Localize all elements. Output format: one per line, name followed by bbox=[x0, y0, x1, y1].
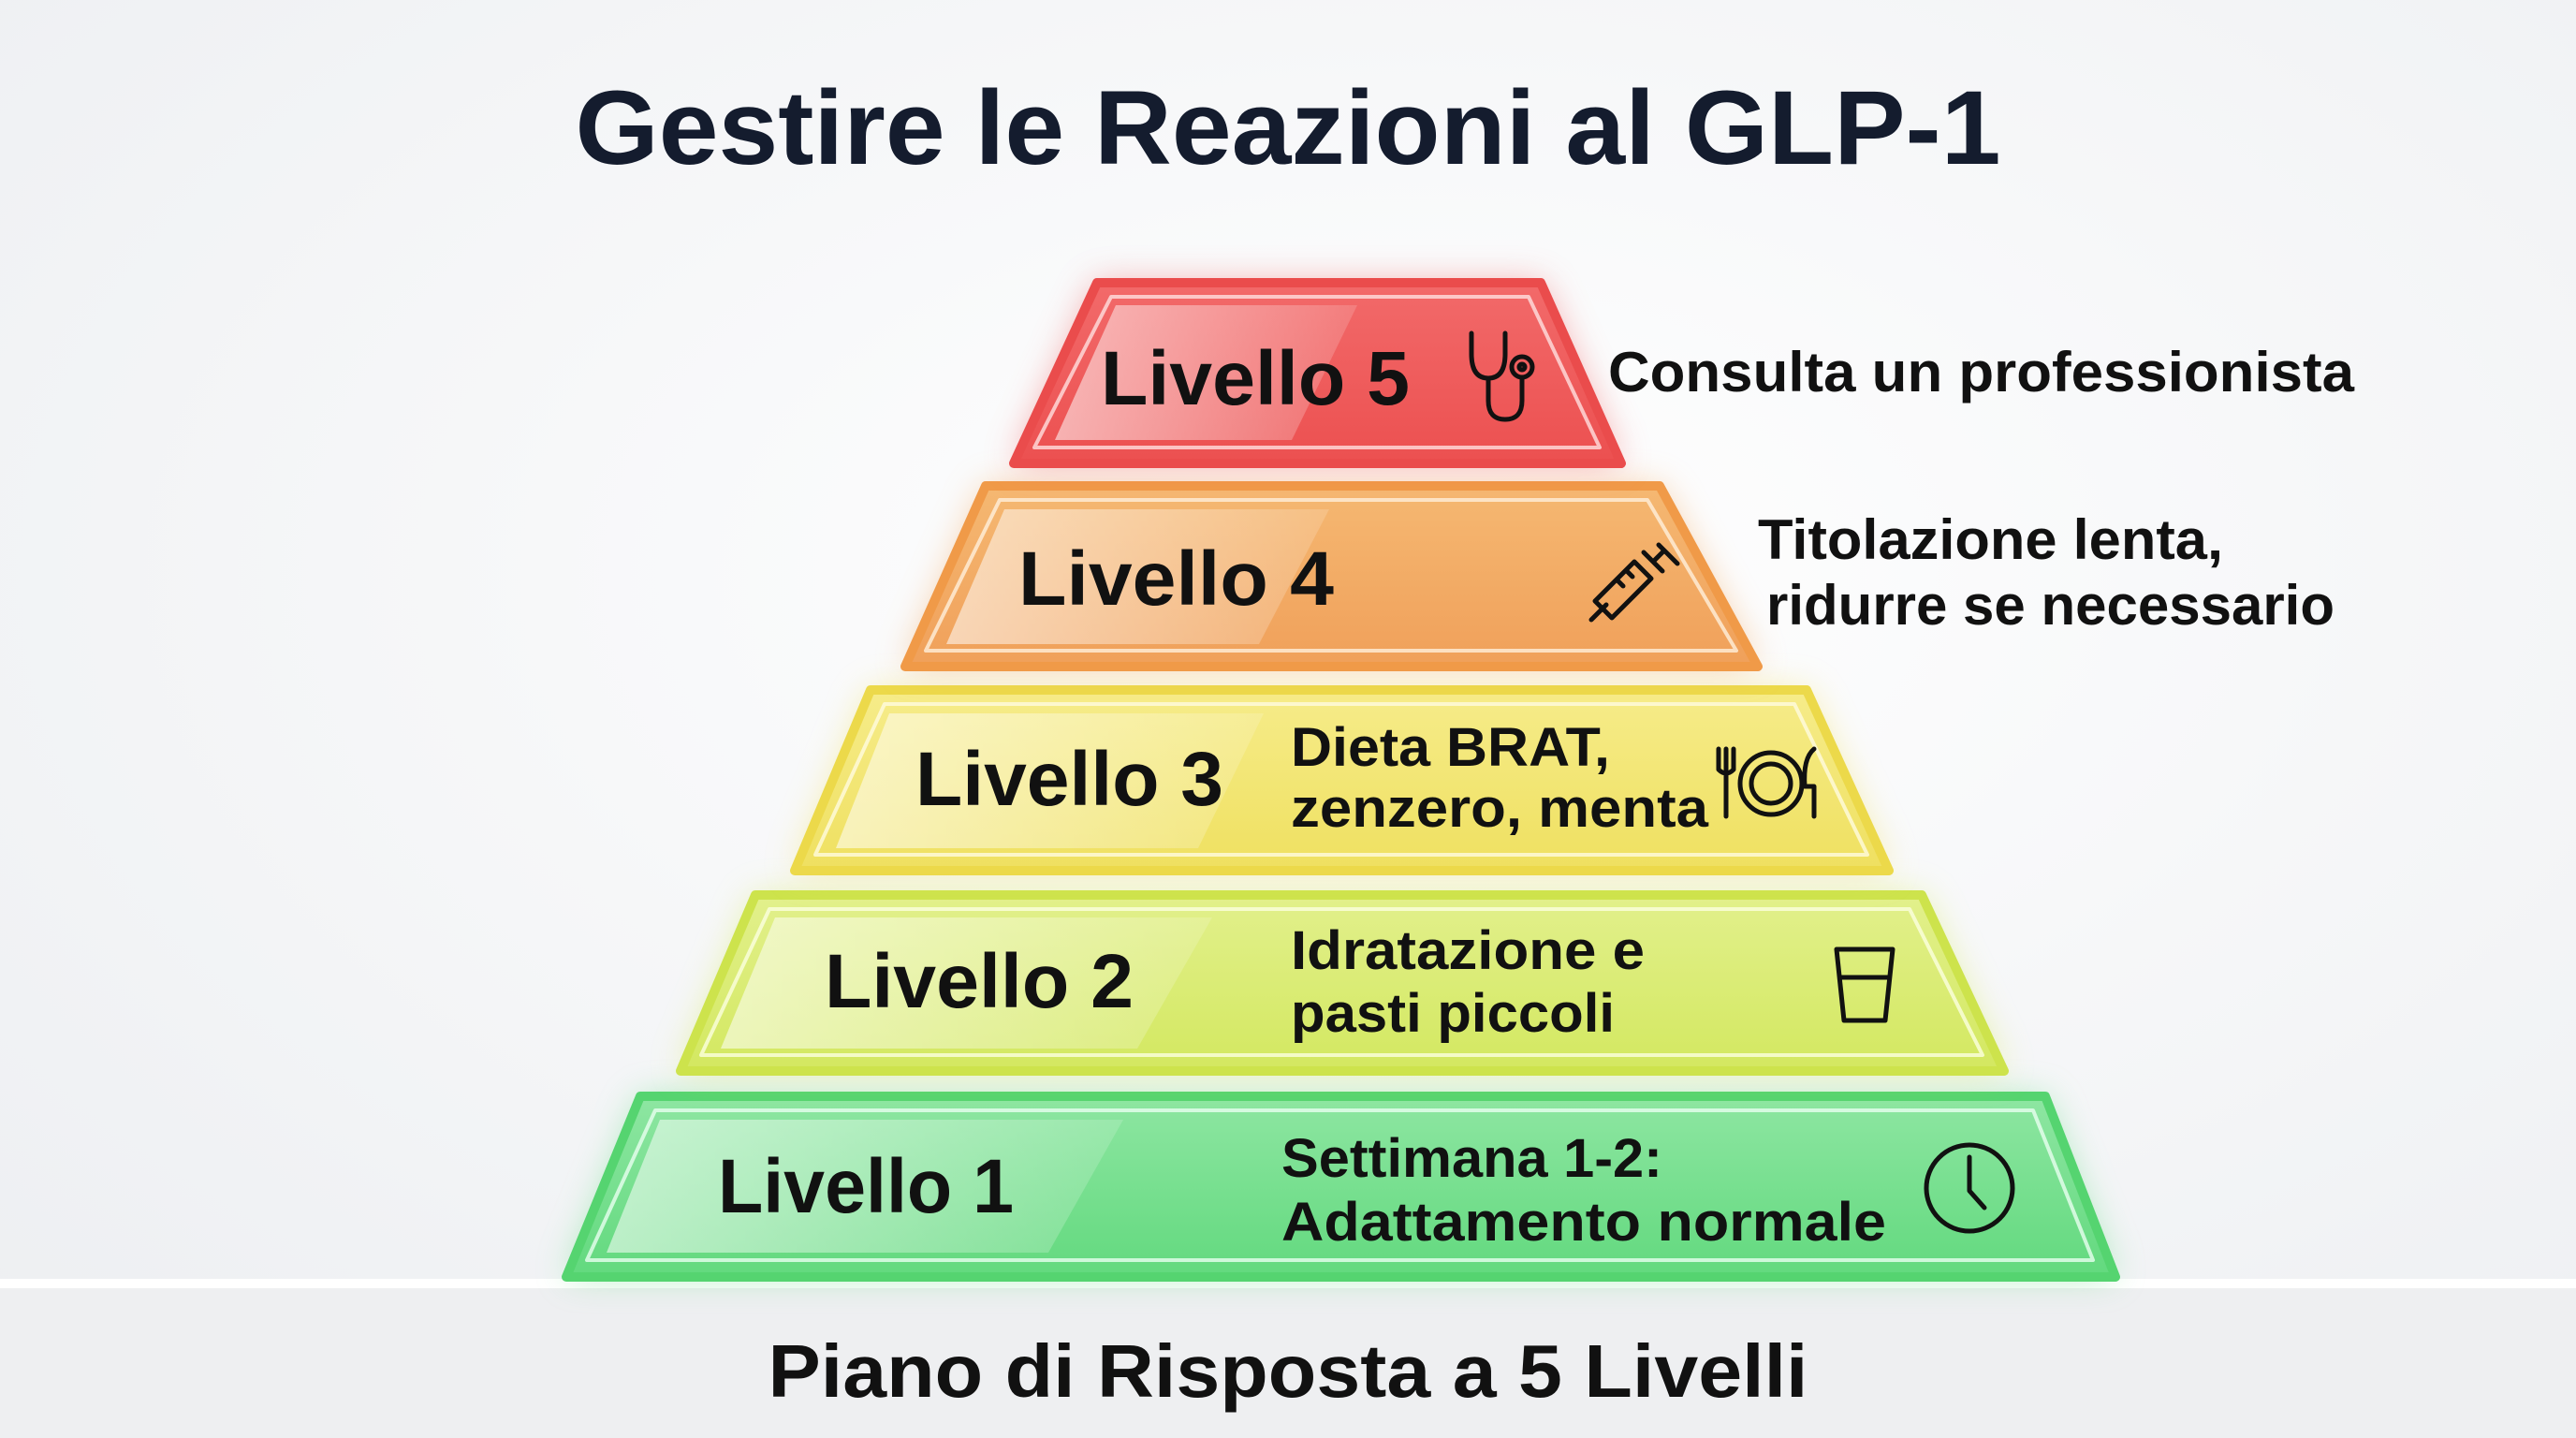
tier: level 1: Adattamento normale bbox=[1281, 1192, 1886, 1253]
tier: level 1 bbox=[566, 1096, 2115, 1277]
tier: level 5: Livello 5 bbox=[1101, 336, 1410, 421]
tier: level 1: Livello 1 bbox=[718, 1144, 1014, 1229]
tier: level 2: Livello 2 bbox=[825, 939, 1134, 1024]
footer band bbox=[0, 1284, 2576, 1438]
icon: plate and cutlery bbox=[1719, 749, 1814, 816]
tier: level 2: pasti piccoli bbox=[1291, 983, 1615, 1044]
tier: level 4 bbox=[905, 486, 1758, 667]
callout: level 4: ridurre se necessario bbox=[1766, 574, 2334, 637]
tier: level 3 bbox=[795, 690, 1889, 871]
tier: level 3: zenzero, menta bbox=[1291, 778, 1709, 839]
icon: glass of water bbox=[1837, 949, 1893, 1020]
callout: level 4 bbox=[1758, 508, 2334, 637]
tier: level 3: Dieta BRAT, bbox=[1291, 717, 1610, 778]
icon: stethoscope bbox=[1471, 333, 1532, 419]
tier: level 5 bbox=[1014, 283, 1621, 463]
tier: level 3: Livello 3 bbox=[915, 737, 1223, 822]
tier: level 2: Idratazione e bbox=[1291, 920, 1645, 981]
pyramid bbox=[566, 283, 2115, 1277]
icon: clock bbox=[1926, 1145, 2012, 1231]
callout: level 4: Titolazione lenta, bbox=[1758, 508, 2223, 571]
callout: level 5: Consulta un professionista bbox=[1608, 341, 2355, 404]
title: Gestire le Reazioni al GLP-1 bbox=[575, 69, 2001, 186]
tier: level 1: Settimana 1-2: bbox=[1281, 1128, 1662, 1189]
footer caption: Piano di Risposta a 5 Livelli bbox=[768, 1329, 1808, 1413]
icon: syringe bbox=[1591, 545, 1677, 620]
tier: level 2 bbox=[681, 895, 2004, 1071]
tier: level 4: Livello 4 bbox=[1018, 536, 1334, 622]
